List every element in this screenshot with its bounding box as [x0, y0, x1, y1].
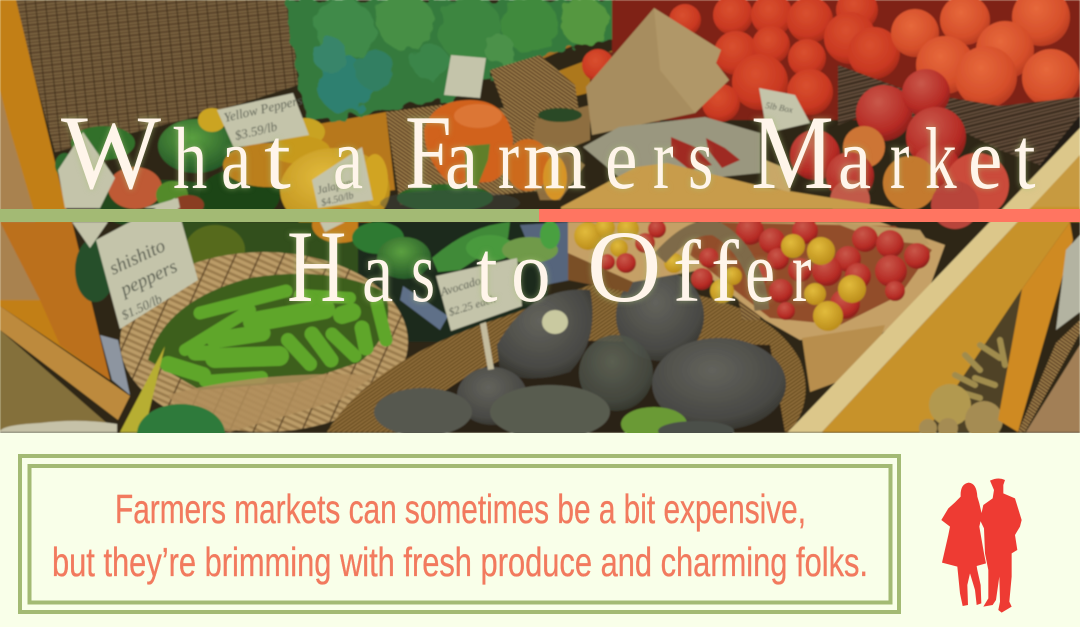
kale	[286, 0, 618, 124]
shishito basket	[120, 252, 408, 432]
pods and potatoes	[919, 289, 1022, 439]
divider band: green segment	[0, 209, 539, 222]
green peppers left	[55, 119, 280, 230]
tag stick	[480, 322, 494, 370]
title: r	[890, 111, 909, 208]
background photo: produce stand: peppers	[115, 256, 181, 301]
right corner wicker and wood	[1018, 320, 1080, 432]
title: f	[711, 223, 739, 320]
title: r	[792, 224, 811, 321]
background photo: produce stand: Jalapeno	[316, 175, 358, 197]
cherry tomato crate	[568, 217, 945, 392]
title: m	[523, 110, 587, 208]
title: a	[333, 110, 363, 207]
wooden crate	[561, 163, 900, 209]
produce below band, dark base	[180, 222, 390, 282]
green fruit bottom left	[137, 404, 225, 464]
grey basket with red peppers	[583, 117, 760, 180]
background photo: produce stand	[0, 0, 1080, 464]
yellow peppers	[198, 108, 390, 232]
title: e	[605, 111, 637, 208]
background photo: produce stand: Avocado	[438, 273, 482, 299]
icon: couple silhouette	[941, 478, 1022, 613]
title: a	[221, 110, 251, 207]
title	[61, 94, 1036, 324]
title: o	[511, 223, 551, 321]
grey strip by post	[100, 335, 130, 395]
background photo: produce stand: $2.25 each	[447, 293, 498, 319]
background photo: produce stand: $1.50/lb	[119, 291, 165, 323]
top right tomatoes	[612, 0, 1080, 120]
title: h	[173, 111, 207, 208]
right table leg	[998, 222, 1073, 432]
title: s	[411, 223, 435, 321]
title: O	[587, 210, 661, 324]
inner border	[30, 466, 890, 602]
background photo: produce stand: shishito	[106, 236, 169, 280]
title: r	[498, 110, 519, 208]
wicker basket centre top	[386, 105, 545, 205]
dark wicker basket right	[838, 65, 1080, 165]
title: k	[925, 110, 957, 208]
cherry basket handle	[660, 228, 762, 310]
title: W	[61, 94, 161, 211]
title: r	[653, 110, 674, 208]
title: a	[445, 109, 478, 207]
title: a	[362, 224, 393, 321]
title: e	[745, 223, 775, 320]
wooden shelf behind kale	[313, 112, 395, 195]
small tomatoes left of basket handle	[568, 218, 666, 292]
orange peppers	[424, 100, 567, 200]
title: t	[1014, 109, 1036, 207]
price tags	[58, 55, 810, 331]
bottom panel background	[0, 433, 1080, 627]
left wooden post	[0, 0, 110, 380]
callout box	[20, 456, 899, 612]
background photo: produce stand: $3.59/lb	[233, 119, 279, 143]
dark gap behind rail	[1040, 115, 1080, 170]
paper bags	[586, 8, 729, 135]
outer border	[20, 456, 899, 612]
callout text	[52, 486, 868, 585]
red tomatoes in crate	[790, 69, 1009, 229]
title: t	[476, 222, 498, 320]
callout text: Farmers markets can sometimes be a bit expensive,	[115, 486, 806, 532]
lower left wood beam	[0, 330, 117, 432]
blue basket with green peppers	[352, 184, 570, 342]
wicker basket top left	[14, 0, 298, 152]
title: f	[673, 223, 701, 320]
avocado basket	[327, 226, 806, 441]
title: s	[688, 110, 713, 207]
background photo: produce stand: 5lb Box	[765, 100, 794, 115]
yellow leaf	[120, 346, 165, 432]
title: a	[838, 109, 871, 207]
title: e	[968, 109, 1002, 207]
title: H	[287, 210, 347, 324]
title: t	[264, 111, 291, 208]
right wood structures	[822, 155, 1080, 432]
background photo: produce stand: $4.50/lb	[320, 190, 355, 209]
background photo: produce stand: Yellow Peppers	[222, 92, 304, 125]
divider band: coral segment	[539, 209, 1080, 222]
title: M	[751, 94, 834, 211]
title: F	[405, 94, 452, 211]
